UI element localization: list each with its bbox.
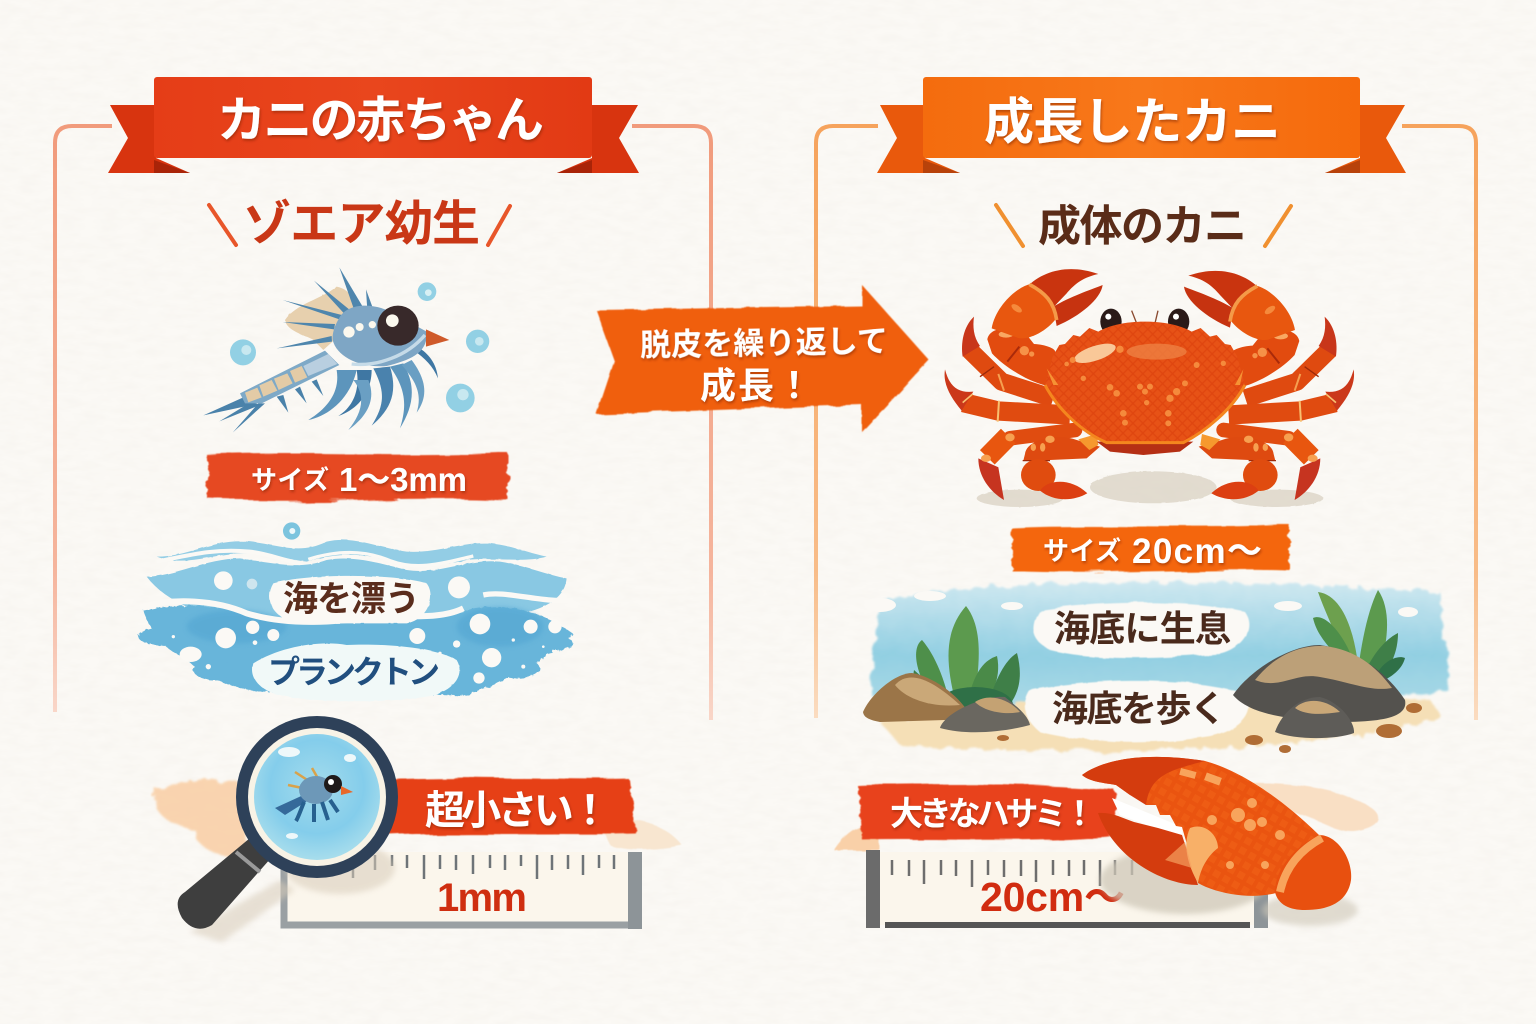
size band: baby crab: サイズ: [251, 465, 329, 495]
magnifier shadow: [190, 842, 395, 942]
body: [333, 306, 427, 366]
claw palm: [992, 284, 1057, 338]
big scale: 20cm: [834, 757, 1378, 928]
ocean floor illustration: [863, 582, 1448, 753]
lower finger: [1098, 813, 1198, 885]
ruler: [868, 852, 1262, 925]
heading: adult crab: 成体のカニ: [1038, 203, 1247, 251]
palm and upper finger: [1082, 757, 1319, 896]
arrow: grows through moulting: [596, 285, 929, 432]
small scale: 1mm: 超小さい！: [425, 789, 610, 833]
label: drifting in the sea: 海を漂う: [283, 580, 420, 619]
big scale: 20cm: 20cm〜: [980, 874, 1125, 920]
small scale: 1mm: 1mm: [437, 876, 527, 920]
label: plankton: プランクトン: [268, 654, 440, 690]
illustration: adult crab: [945, 269, 1354, 507]
title ribbon: baby crab: [108, 77, 639, 173]
size band: adult crab: 20cm〜: [1132, 532, 1262, 571]
walking leg 3: [1010, 430, 1075, 438]
label: walks on the sea floor: 海底を歩く: [1052, 688, 1226, 729]
size band: adult crab: [1012, 525, 1290, 572]
seaweed right: [1313, 590, 1405, 682]
walking leg 2: [963, 403, 1070, 415]
title text: baby crab: カニの赤ちゃん: [217, 94, 544, 148]
big scale: 20cm: 大きなハサミ！: [890, 795, 1096, 832]
panel: adult crab frame: [816, 126, 1476, 720]
size band: adult crab: サイズ: [1043, 536, 1121, 566]
bubbles: [230, 282, 489, 412]
claw fingers: [1027, 269, 1098, 307]
sand: [880, 694, 1440, 751]
red brush label: [390, 779, 636, 836]
arrow: grows through moulting: 脱皮を繰り返して: [640, 324, 888, 363]
mini zoea: [275, 768, 353, 822]
walking leg 4: [1023, 437, 1100, 461]
spines: [277, 267, 373, 348]
title text: adult crab: 成長したカニ: [984, 94, 1281, 150]
ruler: [284, 852, 632, 925]
magnifier: [178, 716, 398, 929]
rocks: [863, 673, 968, 722]
red brush label: [858, 784, 1118, 840]
carapace: [1097, 442, 1193, 455]
big claw: [1082, 757, 1358, 926]
small scale: 1mm: [156, 716, 682, 942]
size band: baby crab: [208, 453, 508, 500]
size band: baby crab: 1〜3mm: [339, 461, 467, 498]
ocean illustration: drifting: [138, 522, 573, 701]
panel: baby crab frame: [55, 126, 711, 720]
walking leg 1: [969, 350, 1053, 398]
illustration: zoea larva: [203, 267, 489, 433]
label backing shapes: [1033, 603, 1249, 658]
title ribbon: adult crab: [877, 77, 1406, 173]
arrow: grows through moulting: 成長！: [700, 365, 812, 406]
seaweed left: [913, 606, 1020, 723]
eyes and antennae: [1132, 311, 1158, 323]
claw gap: [1112, 798, 1182, 838]
shadow: [977, 471, 1323, 507]
claw arm: [987, 328, 1055, 387]
tail: [203, 379, 323, 433]
claw wrist: [1275, 835, 1351, 910]
legs: [308, 370, 357, 420]
label: lives on the sea floor: 海底に生息: [1054, 608, 1231, 649]
heading: zoea larva: ゾエア幼生: [243, 198, 480, 251]
